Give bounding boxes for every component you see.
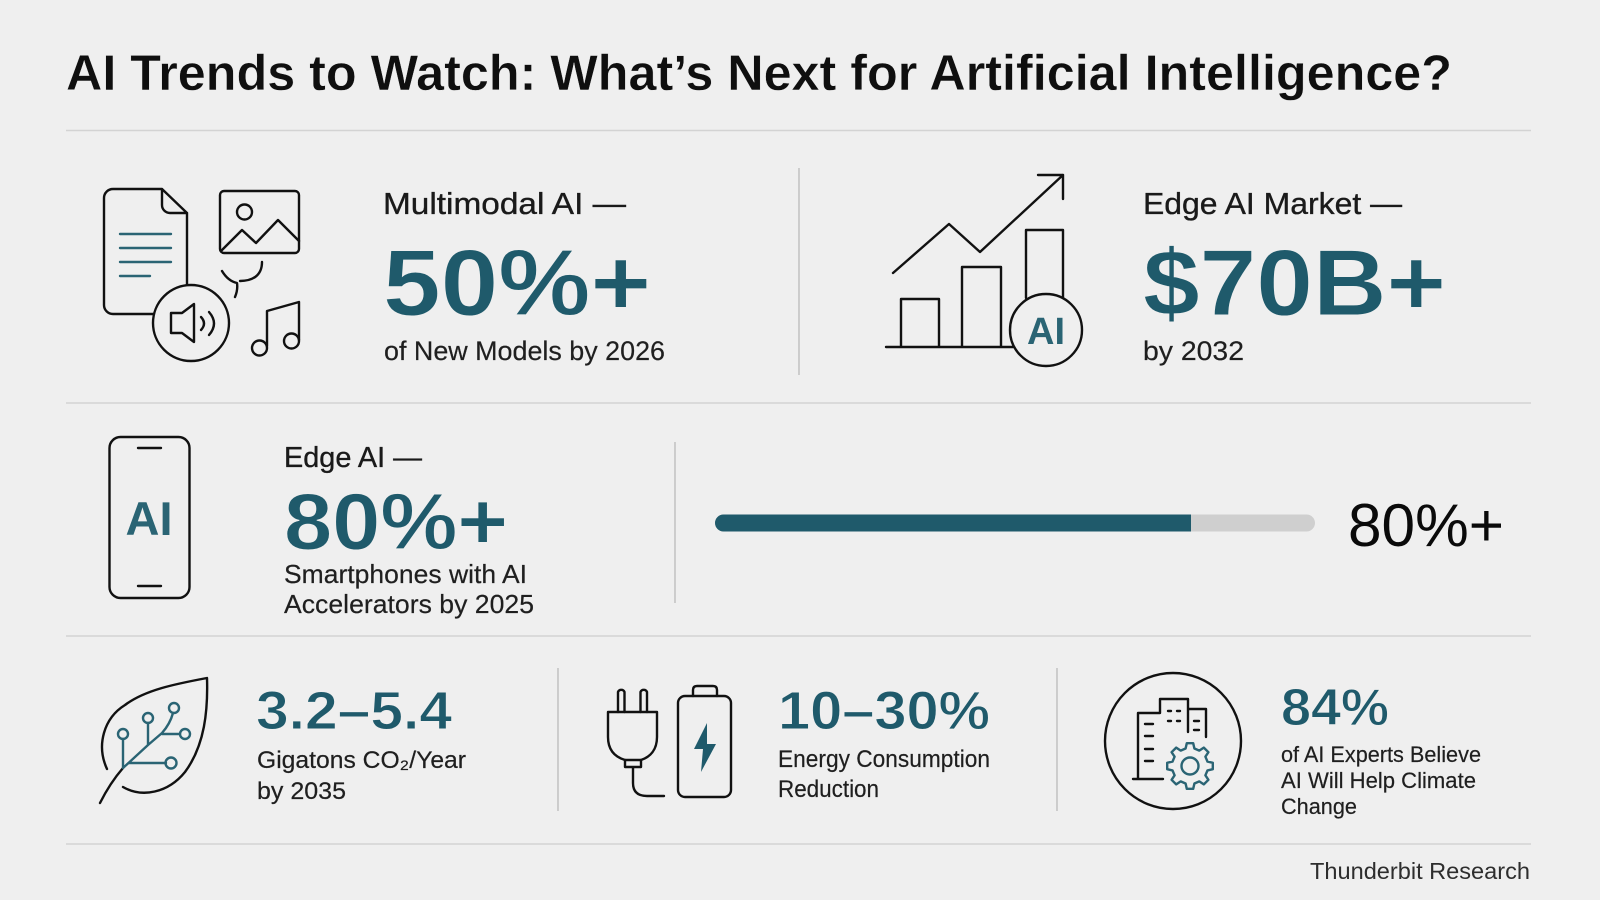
icon: bar chart with rising arrow: AI [1027, 311, 1065, 353]
big number: 50%+ [383, 230, 651, 335]
icon: document, image, audio and music [104, 189, 299, 361]
panel: multimodal AI [104, 186, 665, 366]
big number: 3.2–5.4 [256, 681, 452, 741]
bar value: 80%+ [1348, 492, 1504, 559]
heading: Edge AI — [284, 442, 422, 474]
big number: 80%+ [284, 477, 508, 566]
caption: Energy Consumption [778, 746, 990, 773]
caption line 3: Change [1281, 794, 1357, 819]
icon: smartphone [110, 437, 190, 598]
caption line 2: Reduction [778, 776, 879, 803]
icon: smartphone: AI [126, 492, 172, 545]
caption: Smartphones with AI [284, 559, 527, 589]
panel: energy [608, 681, 990, 803]
title: AI Trends to Watch: What’s Next for Artificial Intelligence? [66, 45, 1452, 101]
caption line 2: AI Will Help Climate [1281, 768, 1476, 793]
progress bar: 80% [715, 492, 1504, 559]
heading: Edge AI Market — [1143, 186, 1402, 221]
caption line 2: by 2035 [257, 778, 346, 805]
source credit: Thunderbit Research [1310, 858, 1530, 884]
caption: of AI Experts Believe [1281, 742, 1481, 767]
big number: 84% [1281, 679, 1389, 737]
icon: plug and battery [608, 686, 731, 797]
panel: emissions [100, 678, 466, 805]
panel: climate experts [1105, 673, 1481, 819]
icon: buildings and gear in circle [1105, 673, 1241, 809]
caption: by 2032 [1143, 336, 1244, 366]
icon: bar chart with rising arrow [886, 175, 1082, 366]
panel: edge AI smartphones [110, 437, 534, 619]
heading: Multimodal AI — [383, 186, 626, 221]
big number: 10–30% [778, 681, 990, 741]
caption line 2: Accelerators by 2025 [284, 589, 534, 619]
caption: Gigatons CO₂/Year [257, 747, 466, 774]
panel: edge AI market [886, 175, 1446, 366]
big number: $70B+ [1143, 230, 1446, 335]
caption: of New Models by 2026 [384, 336, 665, 366]
icon: circuit leaf [100, 678, 207, 803]
